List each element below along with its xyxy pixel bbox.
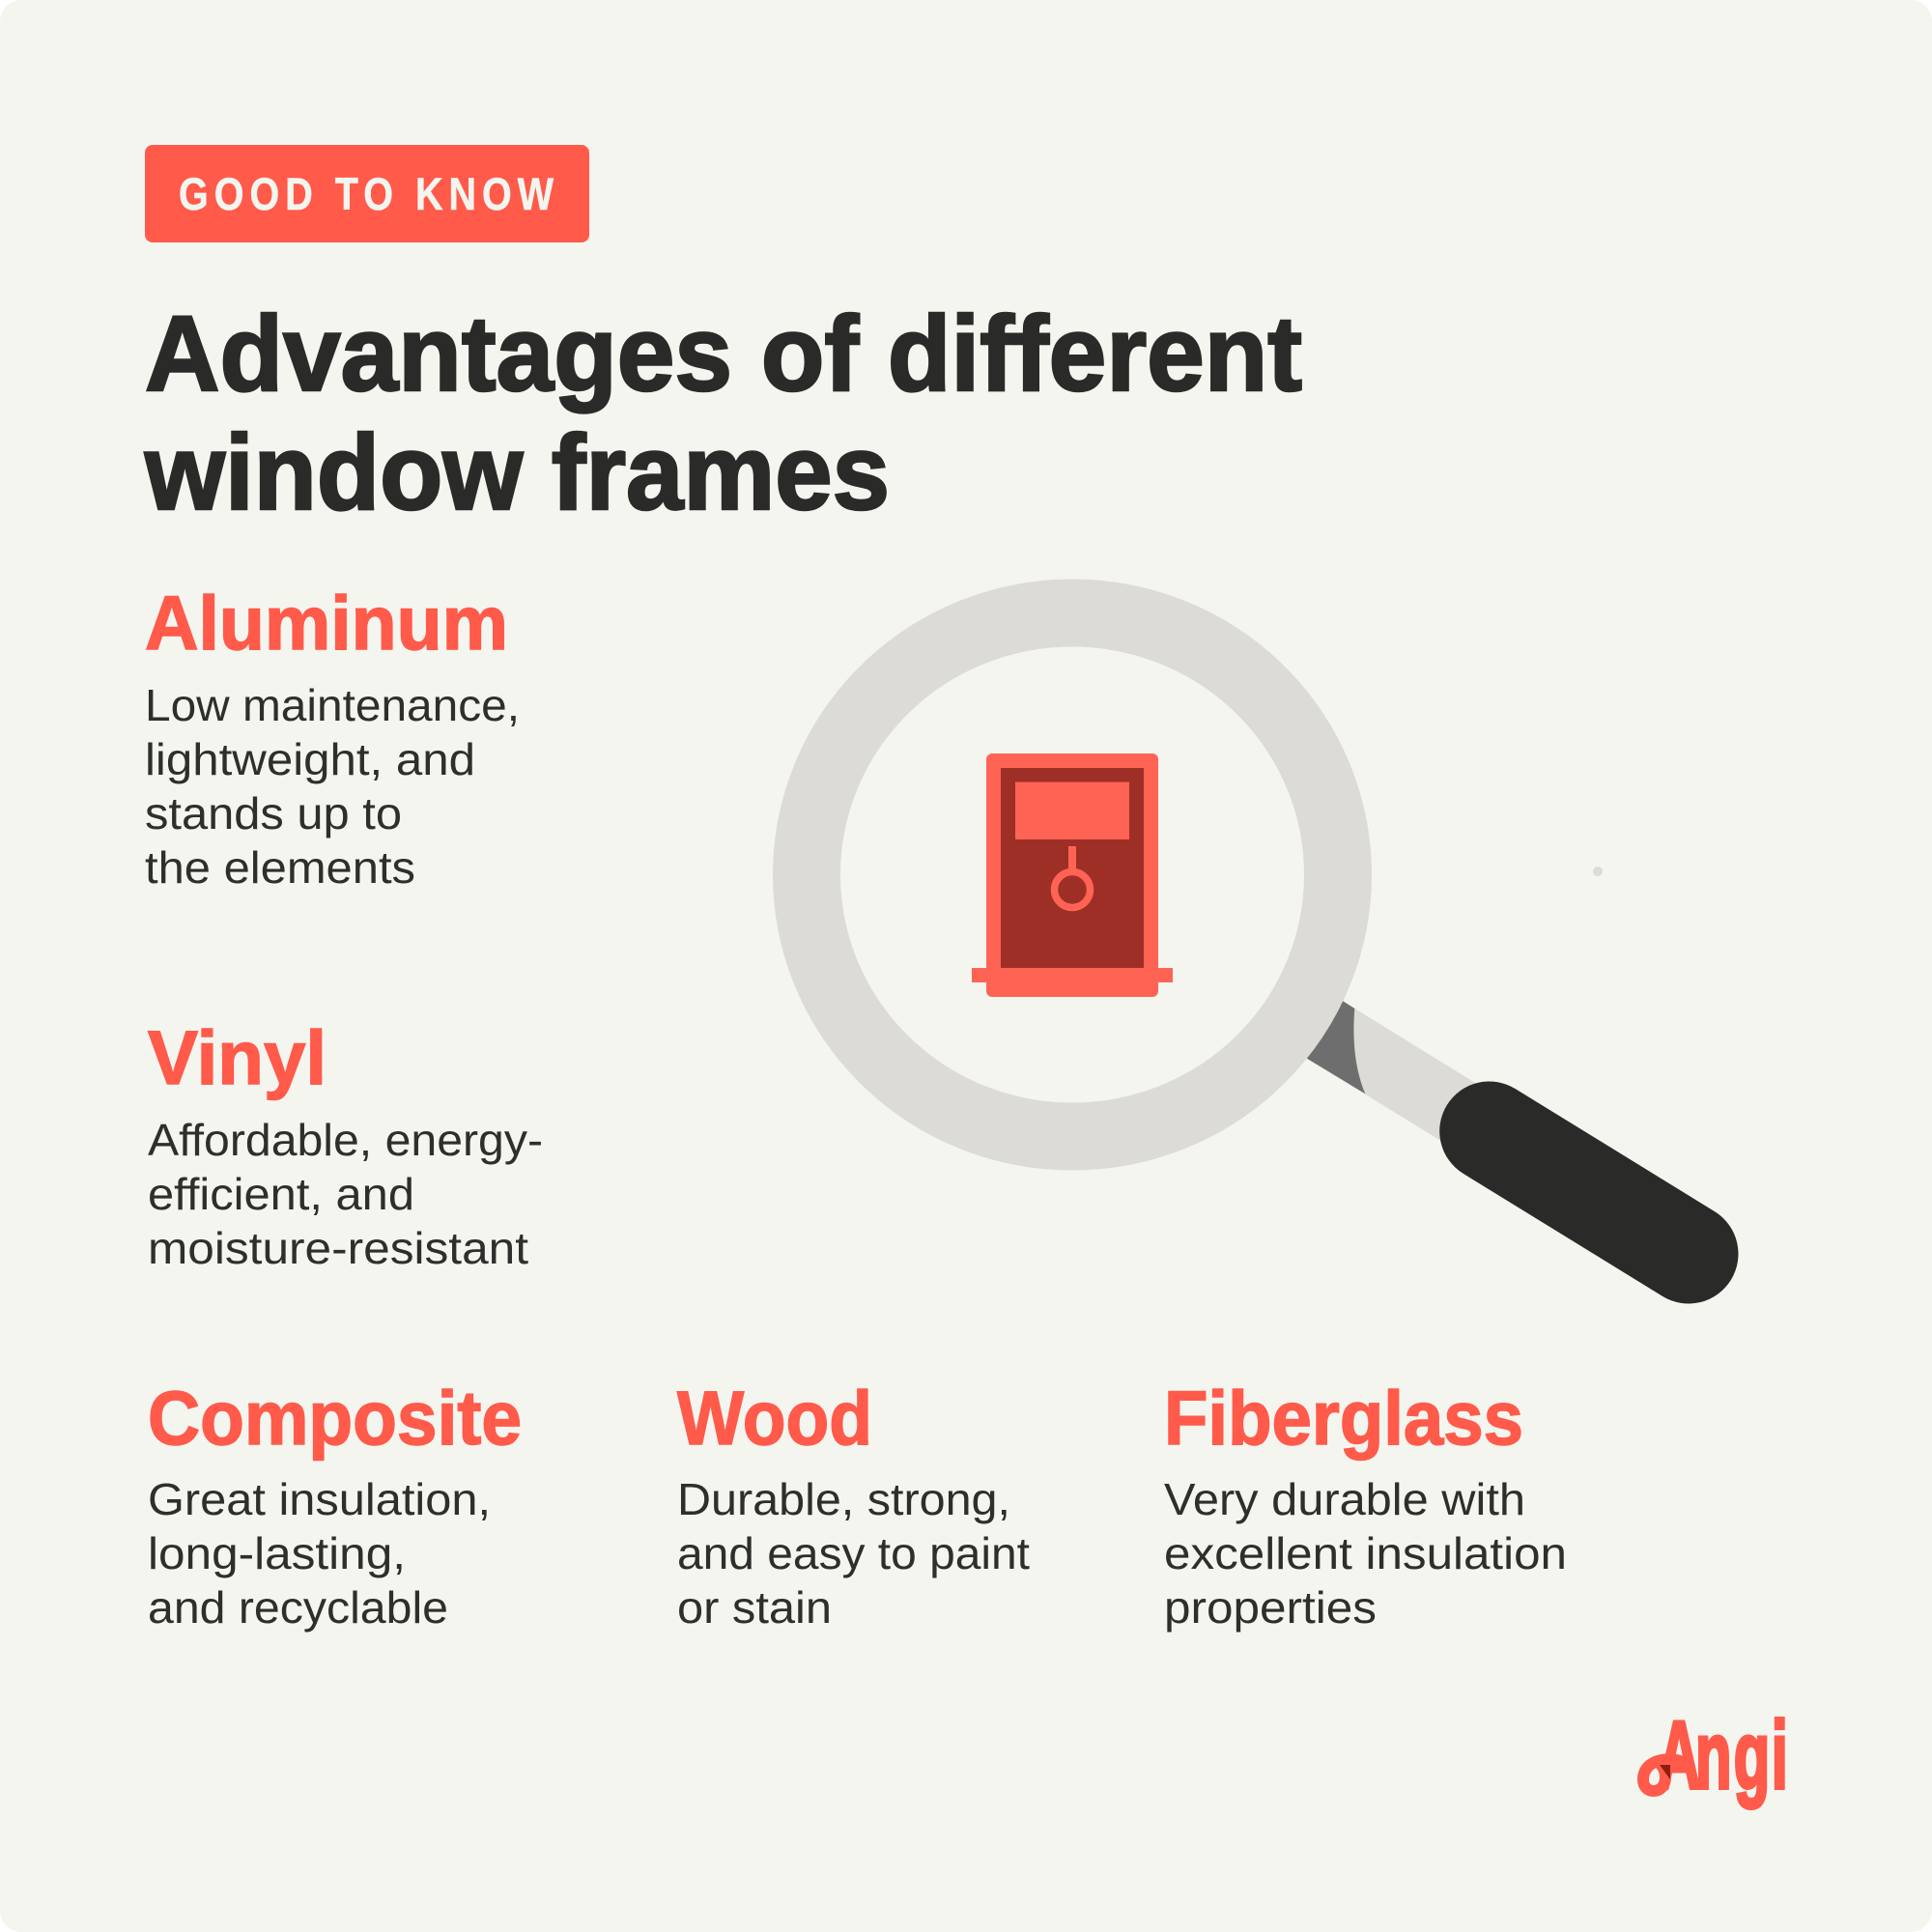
badge: good to know: GOOD TO KNOW	[179, 170, 554, 220]
title: window frames	[144, 413, 890, 532]
panel: vinyl: moisture-resistant	[148, 1223, 528, 1273]
panel: wood: or stain	[677, 1582, 832, 1633]
icon: window	[972, 753, 1173, 997]
decorative dot	[1593, 867, 1603, 876]
panel: aluminum: Low maintenance,	[145, 680, 520, 730]
panel: wood: Durable, strong,	[677, 1474, 1010, 1524]
title: Advantages of different	[145, 295, 1302, 413]
logo: Angi: Angi	[1658, 1702, 1788, 1809]
panel: composite: long-lasting,	[148, 1528, 406, 1578]
panel: composite	[148, 1375, 522, 1633]
title	[144, 295, 1302, 532]
panel: aluminum: stands up to	[145, 788, 402, 838]
panel: aluminum	[145, 580, 520, 893]
panel: wood: Wood	[677, 1375, 872, 1461]
panel: aluminum: the elements	[145, 842, 415, 893]
panel: fiberglass	[1164, 1375, 1567, 1633]
panel: vinyl: efficient, and	[148, 1169, 414, 1219]
panel: fiberglass: properties	[1164, 1582, 1377, 1633]
panel: aluminum: lightweight, and	[145, 734, 475, 784]
panel: vinyl: Vinyl	[148, 1014, 327, 1100]
panel: wood	[677, 1375, 1030, 1633]
panel: fiberglass: excellent insulation	[1164, 1528, 1567, 1578]
panel: composite: Great insulation,	[148, 1474, 491, 1524]
panel: aluminum: Aluminum	[145, 580, 508, 666]
panel: vinyl	[148, 1014, 543, 1273]
panel: composite: Composite	[148, 1375, 522, 1461]
panel: fiberglass: Fiberglass	[1164, 1375, 1523, 1461]
icon: magnifying glass	[807, 612, 1689, 1254]
panel: vinyl: Affordable, energy-	[148, 1115, 543, 1165]
panel: wood: and easy to paint	[677, 1528, 1030, 1578]
panel: fiberglass: Very durable with	[1164, 1474, 1525, 1524]
badge: good to know	[145, 145, 589, 242]
panel: composite: and recyclable	[148, 1582, 448, 1633]
